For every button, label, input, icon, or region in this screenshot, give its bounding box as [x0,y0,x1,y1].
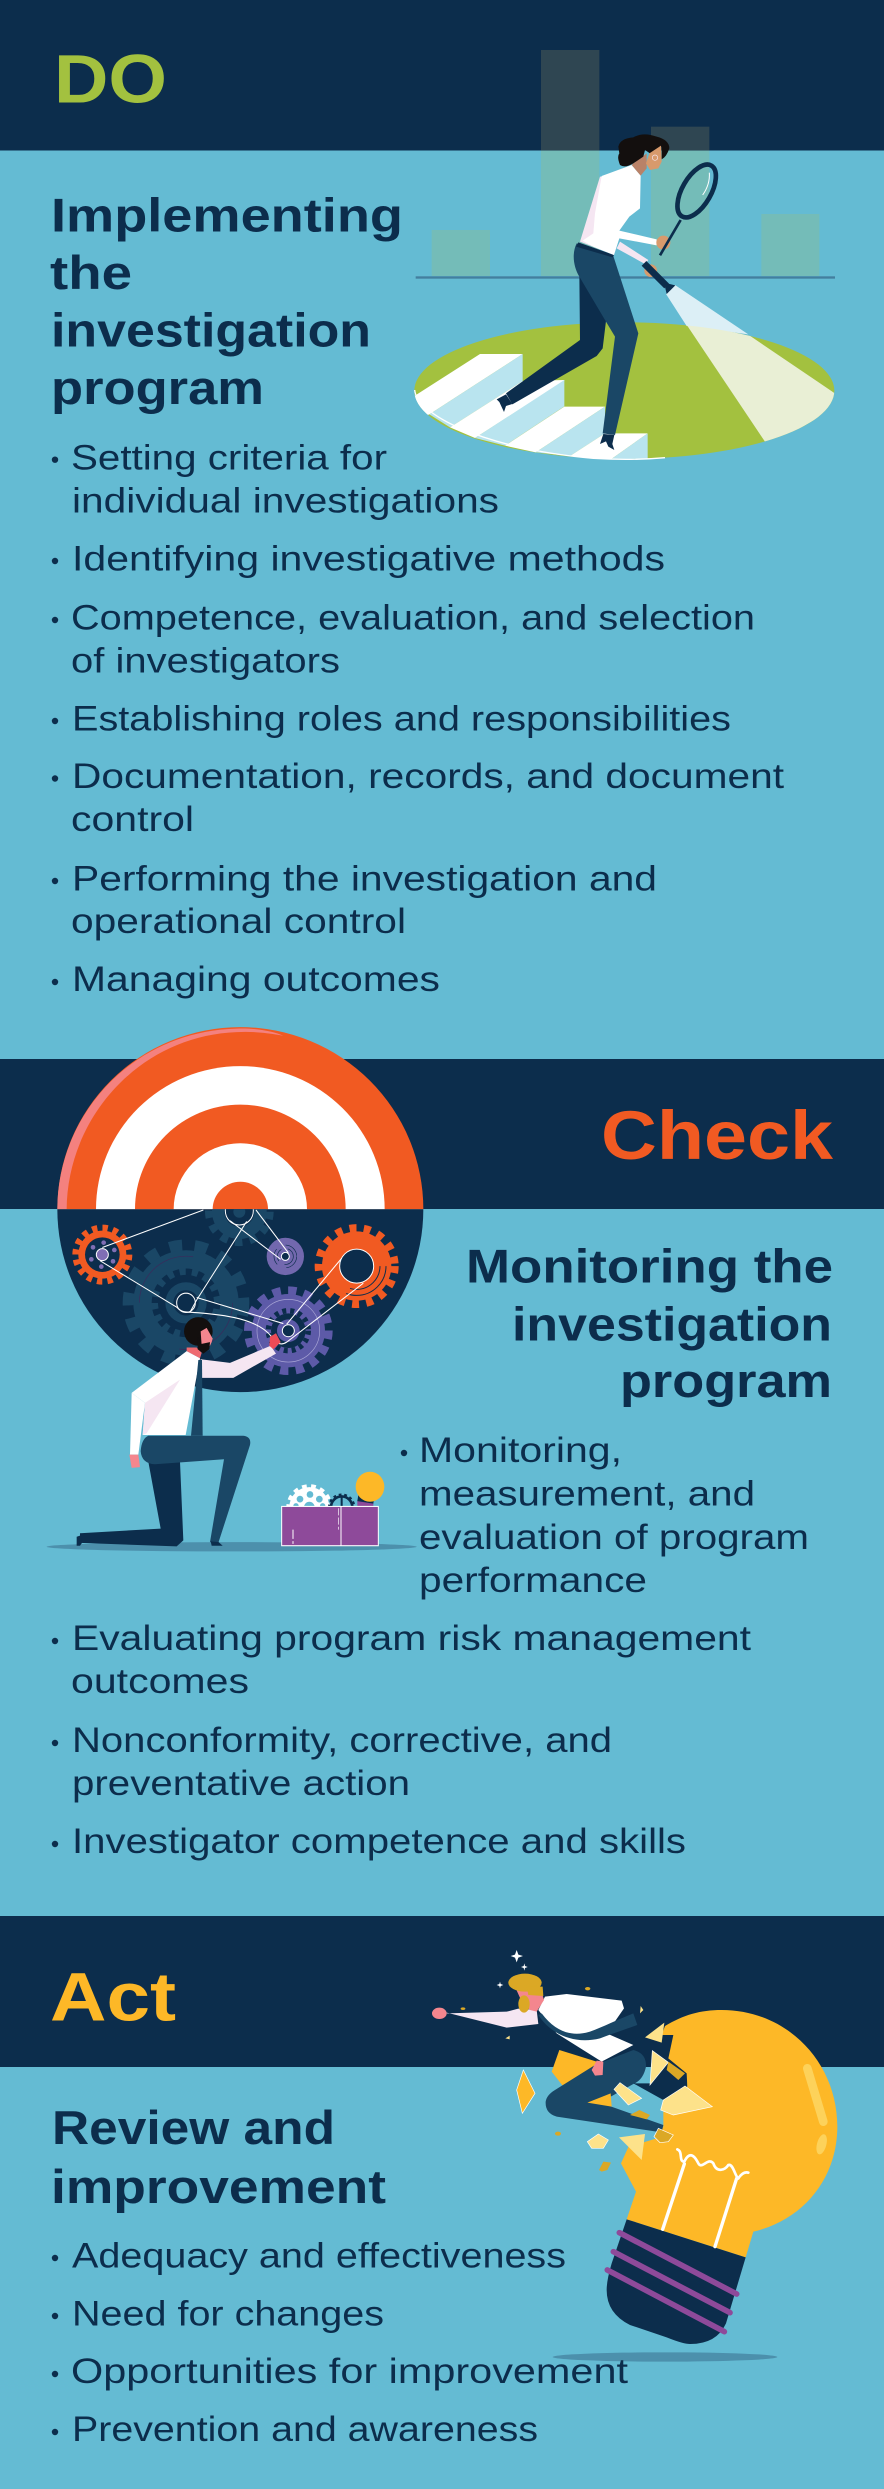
gear: small orange [76,1228,129,1281]
list: Check items: evaluation of program [419,1518,809,1557]
list: Check items: Evaluating program risk management [72,1619,751,1658]
flying man [432,1974,663,2132]
list: Do items [52,438,784,999]
list: Act items: Opportunities for improvement [71,2352,628,2391]
list: Check items: performance [419,1561,647,1600]
sparkles [497,1950,528,1988]
heading: Review and improvement: Review and [52,2101,335,2154]
heading: Monitoring the investigation program: investigation [512,1298,832,1351]
list: Do items: Establishing roles and responsibilities [72,700,731,738]
list: Do items: of investigators [71,641,340,680]
band: Check header [0,1059,884,1209]
list: Do items: Setting criteria for [71,438,387,477]
band: Do header [0,0,884,150]
band: Act header [0,1916,884,2067]
list: Check items: preventative action [72,1764,410,1803]
list: Do items: Identifying investigative methods [72,540,665,579]
target upper half [57,1027,424,1210]
heading: Implementing the investigation program: the [50,246,132,299]
gears lower half [57,1209,424,1392]
green spotlight ellipse with stairs [413,285,847,460]
gear: large dark [129,1246,243,1360]
heading: Monitoring the investigation program: Monitoring the [466,1240,833,1293]
purple disc [267,1238,304,1275]
heading: Implementing the investigation program: program [51,361,264,414]
panel: Act [0,1916,884,2449]
gear: top dark [205,1209,274,1246]
heading: Implementing the investigation program: Implementing [51,189,403,242]
list: Do items: individual investigations [72,481,499,520]
list: Do items: Competence, evaluation, and selection [71,598,755,637]
illustration: man bursting out of light bulb [432,1950,837,2362]
heading: Review and improvement: improvement [51,2160,386,2213]
belts [100,1196,363,1344]
light bulb [607,2010,837,2344]
list: Do items: Performing the investigation and [72,860,657,899]
box of gears and bulb [282,1472,384,1546]
list: Check items [52,1431,809,1861]
kneeling man [77,1317,281,1546]
illustration: woman investigating with magnifier and flashlight [413,50,847,460]
ground shadow [47,1542,417,1551]
title: Act: Act [50,1959,176,2036]
panel: Do [0,0,884,999]
heading: Implementing the investigation program [50,189,403,414]
list: Do items: Managing outcomes [72,960,440,999]
gear: large orange [319,1228,395,1304]
list: Do items: control [71,800,194,839]
title: DO: DO [54,41,167,118]
list: Check items: outcomes [71,1662,249,1701]
title: Check: Check [601,1097,834,1174]
list: Act items: Need for changes [72,2295,384,2334]
list: Check items: Nonconformity, corrective, and [72,1721,612,1760]
list: Act items [52,2237,628,2449]
heading: Implementing the investigation program: investigation [51,304,371,357]
bulb shadow [553,2352,777,2362]
list: Do items: operational control [71,902,406,941]
illustration: target with gears and kneeling man [47,1026,423,1551]
list: Check items: measurement, and [419,1474,755,1514]
heading: Review and improvement [51,2101,386,2213]
list: Act items: Prevention and awareness [72,2410,538,2449]
heading: Monitoring the investigation program: program [620,1354,832,1407]
panel: Check [0,1026,884,1861]
gear: purple [248,1291,328,1371]
heading: Monitoring the investigation program [466,1240,833,1407]
list: Act items: Adequacy and effectiveness [72,2237,566,2276]
bar chart backdrop [432,50,819,276]
list: Do items: Documentation, records, and document [72,757,784,796]
flying shards [461,1987,712,2172]
list: Check items: Investigator competence and skills [72,1822,686,1861]
list: Check items: Monitoring, [419,1431,622,1470]
woman figure [497,134,724,450]
